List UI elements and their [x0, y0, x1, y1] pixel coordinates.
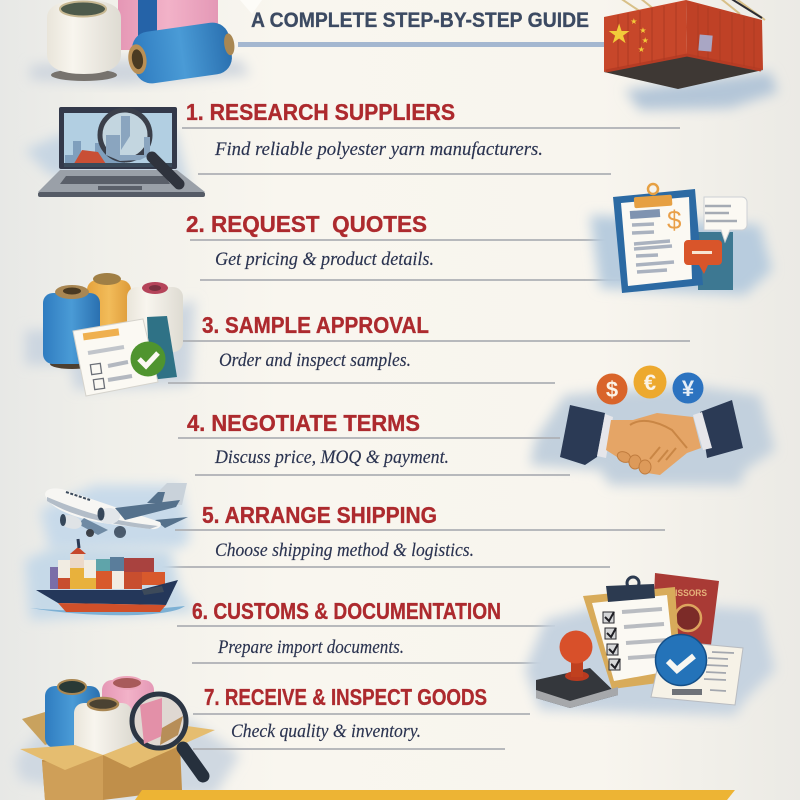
icon: flag stars: ★	[607, 19, 631, 50]
icon: passport: CAISSORS	[663, 588, 707, 598]
icon: airplane	[40, 483, 190, 550]
icon: yen coin	[672, 372, 704, 404]
icon: flag stars: ★	[639, 26, 647, 35]
icon: handshake with currency coins	[530, 366, 775, 485]
step 3	[25, 273, 690, 396]
description: Choose shipping method & logistics.	[215, 540, 474, 561]
icon: passport	[652, 573, 719, 645]
subtitle underline	[238, 42, 604, 47]
icon: yen coin: ¥	[682, 376, 695, 401]
description: Check quality & inventory.	[231, 721, 421, 742]
icon: laptop with magnifier	[25, 107, 205, 197]
icon: euro coin	[634, 366, 666, 398]
icon: flag stars: ★	[638, 45, 645, 54]
subtitle: A COMPLETE STEP-BY-STEP GUIDE	[251, 9, 589, 32]
heading: 2. REQUEST QUOTES	[186, 211, 427, 237]
icon: flag stars: ★	[642, 36, 649, 45]
icon: quote clipboard with speech bubbles: $	[667, 205, 682, 235]
icon: flag stars: ★	[630, 17, 637, 26]
icon: dollar coin: $	[606, 377, 618, 402]
icon: yarn spools with approval card	[25, 273, 195, 396]
description: Discuss price, MOQ & payment.	[214, 447, 449, 468]
step 4	[178, 366, 775, 485]
heading: 1. RESEARCH SUPPLIERS	[186, 99, 455, 125]
icon: dollar coin	[596, 374, 628, 404]
heading: 3. SAMPLE APPROVAL	[202, 312, 429, 338]
step 5	[40, 483, 665, 567]
step 1	[25, 99, 680, 197]
icon: customs documents, passport and stamp	[525, 573, 775, 715]
icon: rubber stamp	[536, 630, 618, 708]
description: Get pricing & product details.	[215, 249, 434, 270]
heading: 5. ARRANGE SHIPPING	[202, 502, 437, 528]
description: Order and inspect samples.	[219, 350, 411, 371]
icon: shipping document	[651, 643, 743, 705]
step 7	[15, 677, 530, 800]
footer banner	[135, 790, 735, 800]
icon: quote clipboard with speech bubbles	[590, 184, 772, 295]
icon: container ship	[25, 539, 195, 620]
step 6	[177, 573, 775, 715]
step 2	[186, 184, 772, 295]
icon: yarn spools header	[30, 0, 250, 86]
icon: open box of spools with magnifier	[15, 677, 240, 800]
icon: euro coin: €	[644, 370, 656, 395]
heading: 7. RECEIVE & INSPECT GOODS	[204, 684, 487, 710]
icon: check badge	[656, 634, 706, 686]
description: Prepare import documents.	[217, 637, 404, 658]
heading: 4. NEGOTIATE TERMS	[187, 410, 420, 436]
header banner corner	[240, 0, 262, 14]
heading: 6. CUSTOMS & DOCUMENTATION	[192, 598, 501, 624]
icon: shipping container with flag	[604, 0, 778, 110]
description: Find reliable polyester yarn manufacturers.	[214, 139, 543, 160]
